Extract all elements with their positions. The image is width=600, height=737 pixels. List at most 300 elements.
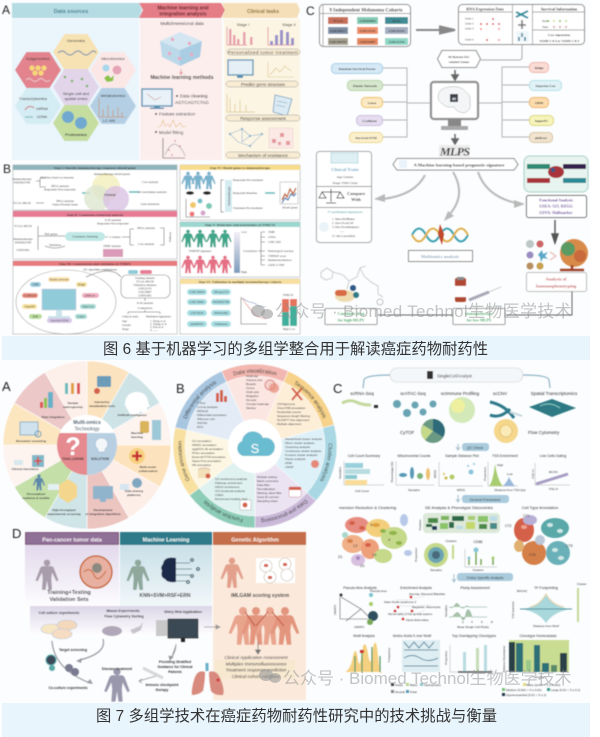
sector text lists: tSNE — [285, 461, 292, 465]
icon: computer with AI brain — [431, 82, 478, 130]
block: melanoma cohorts: 9 Independent Melanoma Cohorts — [329, 8, 403, 14]
chart row: repertoire analysis: Acidic — [395, 683, 404, 687]
chart row: omics specific analysis: Mean Single Cell Ploidy — [457, 625, 489, 629]
panel: step III: Gender — [122, 323, 131, 327]
pill: QC check: QC Check — [467, 446, 483, 450]
center with cloud: S — [251, 441, 260, 456]
block: melanoma cohorts: GSE48517 — [330, 29, 346, 33]
chart row: omics specific analysis: Anemia, Diamond-Blackfan — [409, 592, 446, 596]
QC charts row: Proportion — [483, 467, 487, 481]
sector text lists: Sampling sheet — [257, 499, 278, 503]
left algorithm chips: CoxBoost — [362, 119, 378, 123]
QC charts row: 80.0% — [549, 470, 558, 474]
sector text lists: Violin plot — [246, 390, 259, 394]
block: melanoma cohorts: GSE22155 — [360, 29, 376, 33]
icon: scale — [319, 189, 344, 203]
general framework titles: mension Reduction & Clustering — [339, 505, 396, 510]
heading — [120, 532, 212, 545]
lower workflow: treatment: Disease treatment — [102, 667, 133, 671]
box: immunotherapy — [453, 308, 505, 324]
block: clinical traits and compare: Compare — [347, 191, 365, 196]
panel: step III: Validation datasets: — [133, 283, 157, 287]
sector text lists: Batch correction — [257, 479, 279, 483]
sector text lists: Sequence length filtering — [277, 414, 310, 418]
heading: MLPS: MLPS — [439, 144, 470, 158]
arrow: genes to monitor — [452, 70, 458, 80]
panel: step II: Step II: Consensus clustering analysis — [67, 213, 124, 217]
panel: step III: Published signatures — [146, 314, 172, 318]
band: experiments: Cell culture experiments — [39, 611, 79, 615]
sector text lists: Nucleotide counts — [277, 410, 301, 414]
panel: step III: Step Cox — [82, 304, 94, 308]
panel: step III: plsRcox — [85, 294, 95, 298]
chart: stage bars: Stage II — [282, 22, 296, 27]
hexagon: metabolomics: LC-MS — [103, 118, 116, 123]
pill: predict gene structure: Predict gene structure — [241, 82, 286, 87]
chart: cell type annotation UMAP: CT5 — [566, 544, 573, 548]
panel: step VI — [180, 279, 300, 334]
modality row: Flow Cytometry — [528, 430, 560, 435]
wheel hub: Multi-omics — [73, 420, 101, 426]
text: feature extraction — [155, 112, 196, 127]
hexagon: proteomics — [53, 105, 99, 141]
wedge icons and labels: Biomarker screening — [16, 439, 46, 443]
heading — [26, 532, 118, 544]
panel: step III: SuperPC — [25, 304, 35, 308]
sector text lists: eggNOG-db annotation — [192, 447, 223, 451]
panel: clinical tasks — [222, 3, 300, 160]
chart row: repertoire analysis: Amino Acids K-mer Motif — [393, 634, 431, 638]
modality row: scRNA-Seq — [350, 391, 374, 396]
chart: polar proportion and CD86: Proportion — [414, 548, 418, 562]
pill: QC check — [456, 443, 489, 451]
sector text lists: Enrichment bubble chart — [215, 497, 248, 501]
panel: step IV: Responder-Baseline — [233, 191, 258, 195]
sector text lists: Kmeans cluster analysis — [285, 453, 318, 457]
chart row: omics specific analysis — [333, 582, 587, 629]
hexagon: transcriptomics: mRNA — [36, 106, 48, 111]
panel: step V: Pathological reaction — [268, 249, 294, 253]
ring sectors — [173, 364, 337, 528]
icon: DNA with multiomics label: Multiomics analysis — [421, 254, 459, 259]
pill: response assessment: Response assessment — [240, 116, 287, 121]
ring labels: Sequence analysis — [294, 380, 326, 419]
chart row: repertoire analysis: Hydrophobic — [424, 683, 441, 687]
sector text lists: Differential expression — [197, 413, 227, 417]
panel: step IV — [180, 165, 300, 220]
panel: step II: Responder-Non-responder — [97, 222, 129, 226]
panel: step III: CPH — [33, 282, 39, 286]
chart row: omics specific analysis: UMAP2 — [333, 605, 337, 615]
block: clinical traits and compare: 27. Hu-CancerMed — [332, 234, 356, 238]
hexagon: transcriptomics: cDNA — [37, 114, 48, 119]
sector text lists: Sankey — [246, 406, 257, 410]
chart: model fitting — [155, 130, 185, 158]
panel: step I: RNASeq based on response — [40, 176, 74, 180]
modality row: scImmune Profiling — [441, 391, 480, 396]
panel: step VI: High Low — [283, 327, 296, 331]
chart row: omics specific analysis: Samples — [444, 605, 448, 617]
box: functional analysis: GSVA: Hallmarker — [539, 210, 573, 215]
panel: step I — [12, 165, 177, 212]
right algorithm chips: plsRcox — [535, 136, 547, 140]
hexagon: epigenomics: Epigenomics — [27, 56, 49, 61]
banner: prognostic signature: A Machine learning-based prognostic signature — [414, 162, 504, 168]
icon: computer with AI brain: AI — [452, 96, 456, 101]
pill: personalized tumor treatment: Personalized tumor treatment — [228, 50, 299, 55]
sector text lists: T-Test — [197, 401, 205, 405]
center with cloud — [228, 419, 282, 473]
ring labels: Cluster analysis — [320, 442, 333, 482]
sector text lists: Limma analysis — [197, 405, 218, 409]
arrow: to MLPS — [452, 134, 458, 144]
chart: stage bars — [227, 22, 296, 45]
figure: body group with pathways — [229, 607, 299, 645]
modality row — [342, 391, 578, 443]
panel: step I: Gene mutations — [141, 202, 160, 206]
sector text lists: Hierarchical cluster analysis — [285, 437, 323, 441]
pill: general framework: General Framework — [470, 498, 501, 502]
chart row: omics specific analysis: 8 — [491, 620, 493, 624]
sector text lists: ANOVA — [197, 421, 207, 425]
chart row: omics specific analysis: Tn5 insertion — [511, 601, 515, 619]
chart: multi-omics wheel — [3, 361, 171, 529]
panel: step IV: Responder-Pre-treatment — [233, 178, 263, 182]
hexagon: single-cell and spatial omics — [53, 69, 99, 105]
heading: clinical tasks — [222, 3, 300, 18]
block: clinical traits and compare: 27 published signatures — [327, 210, 363, 214]
wedge icons and labels: platforms — [127, 493, 141, 497]
panel: step III: 3. Fan et al — [150, 325, 163, 329]
panel: step I: DEGs analysis — [56, 199, 75, 203]
sector text lists: Circos — [246, 386, 255, 390]
wedge icons and labels: medicine & models — [22, 496, 50, 500]
left algorithm chips: Survival-SVM — [355, 136, 377, 140]
block: melanoma cohorts: SU2C — [392, 19, 401, 23]
inner sectors — [185, 376, 325, 516]
box: candidate drug — [325, 308, 377, 324]
panel: step IV: Step IV: Model genes in immunotherapy — [210, 166, 270, 170]
lower workflow: treatment: Immune checkpoint — [146, 683, 179, 687]
caption band: figure 7: 图 7 多组学技术在癌症药物耐药性研究中的技术挑战与衡量 — [96, 708, 497, 725]
panel: step I: DEGs analysis — [51, 184, 70, 188]
wedge icons and labels: Data integration — [42, 415, 65, 419]
panel: genetic algorithm: Genetic Algorithm — [231, 538, 279, 544]
chart row: repertoire analysis: Relative Abundance — [502, 645, 506, 672]
icon: network and grid — [229, 128, 293, 148]
band: experiments — [30, 606, 220, 642]
hexagon: single-cell and spatial omics: spatial omics — [64, 96, 88, 101]
map: biological pathways — [524, 156, 588, 192]
chart row: repertoire analysis: Polar — [410, 690, 417, 694]
panel: step VI: IMvigor210 — [214, 290, 229, 294]
panel: step III: GSE91061 — [138, 294, 152, 298]
chart: UMAP clusters: 12 — [353, 543, 358, 548]
sector text lists: GO enrichment analysis — [215, 477, 248, 481]
panel: data sources: Data sources — [54, 9, 88, 15]
box: functional analysis — [526, 196, 586, 218]
text: multidimensional data: Multidimensional data — [160, 21, 204, 26]
icon: monitor — [142, 89, 172, 109]
chart row: omics specific analysis: TF Footprinting — [534, 586, 558, 590]
sector text lists: Boxplot — [246, 382, 256, 386]
panel: step VI: Step VI: Validation in multiple immunotherapy cohorts — [199, 280, 282, 284]
hexagon: microbiomics — [90, 52, 136, 88]
lower workflow: treatment: Providing Stratified — [159, 660, 191, 664]
panel: step VI: PRJEB25780 — [213, 300, 230, 304]
block: clinical traits and compare: Age Gender — [336, 175, 354, 179]
icon: DNA with multiomics label — [408, 224, 472, 262]
chart: UMAP clusters: 21 — [338, 554, 343, 559]
panel: step II: Validation — [49, 243, 62, 247]
chart: DE heatmap: Clusters — [418, 519, 422, 531]
wedge icons and labels: Personalized — [27, 492, 45, 496]
chart: cell type annotation UMAP: CT6 — [529, 553, 536, 557]
QC charts row: FSC-A — [549, 487, 558, 491]
box: candidate drug: Candidate drug — [337, 311, 365, 316]
QC charts row: High — [497, 463, 504, 467]
chart row: omics specific analysis: Cluster — [577, 582, 587, 586]
connectors: algorithms — [383, 67, 529, 137]
right algorithm chips — [530, 62, 562, 142]
chart row: omics specific analysis: Pseudo-time — [370, 589, 387, 593]
panel: step I: Responder-Non-responder — [44, 188, 76, 192]
chart row: repertoire analysis: Hyperexpanded (0.01 < X ≤ 1) — [506, 693, 546, 697]
block: melanoma cohorts: GSE100797 — [329, 40, 347, 44]
chart row: omics specific analysis: BACH2 — [517, 589, 527, 593]
sector text lists: Normalization — [257, 487, 276, 491]
right algorithm chips: SuperPC — [535, 119, 549, 123]
chart: polar proportion and CD86 — [414, 539, 497, 572]
wedge icons and labels: High-throughput — [52, 508, 76, 512]
box: functional analysis: GSEA: GO, KEGG — [539, 204, 573, 208]
wedge icons and labels — [12, 376, 161, 516]
panel: step V: Low — [241, 230, 248, 234]
right algorithm chips: Stepwise Cox — [536, 84, 556, 88]
box: immunophenotyping: Analysis of — [545, 276, 567, 282]
chart: polar proportion and CD86: CD86 — [474, 540, 483, 544]
band: experiments: Flow Cytometry Sorting — [104, 614, 144, 618]
panel label A: A — [2, 379, 11, 394]
ring labels — [177, 368, 333, 523]
arrow — [180, 69, 182, 74]
sector text lists: GO annotation — [192, 439, 212, 443]
text: clinical application: Clinical cohort validation — [232, 674, 281, 679]
wedge icons and labels: heterogeneity — [63, 405, 83, 409]
panel label B: B — [3, 162, 11, 176]
block: RNA expression and survival data: Gene 1 — [465, 16, 474, 20]
panel: pan-cancer tumor data: Training+Testing — [47, 590, 91, 596]
hexagon: transcriptomics — [15, 88, 61, 124]
panel: step V: High — [241, 270, 248, 274]
chart row: repertoire analysis: Frequency — [387, 647, 391, 662]
QC charts row: MDS1 — [457, 488, 465, 492]
panel label C: C — [306, 4, 315, 18]
wedge icons and labels: learning — [131, 435, 143, 439]
hexagon: robust genes: related Genes — [449, 60, 470, 64]
chart: UMAP clusters: 4 — [388, 537, 391, 542]
wedge icons and labels: Development — [94, 508, 112, 512]
chart row: repertoire analysis: Proportion — [444, 651, 448, 665]
ring labels: Function analysis — [204, 500, 244, 523]
lower workflow: treatment: Patients — [168, 670, 182, 674]
text: clinical application: Clinical Application Assessment — [224, 655, 288, 660]
chart row: repertoire analysis — [345, 634, 580, 697]
ring labels: Differential analysis — [182, 380, 217, 420]
chart: model fitting: Model fitting — [159, 130, 184, 135]
panel: step II: Core analysis — [138, 242, 155, 246]
chart row: omics specific analysis: 6 — [481, 620, 483, 624]
panel: step III: 1. Dong et al — [150, 319, 166, 323]
block: RNA expression and survival data — [458, 4, 584, 44]
panel: pan-cancer tumor data: Pan-cancer tumor data — [42, 538, 103, 544]
lower workflow: treatment: therapy — [156, 688, 168, 692]
panel: step I: TNFRSF — [104, 193, 116, 197]
panel: step II: Immunotherapy — [13, 237, 33, 241]
panel: step VI: GSE126044 — [190, 290, 205, 294]
wedge icons and labels: Artificial intelligence — [117, 413, 147, 417]
pill: response assessment — [226, 115, 300, 121]
chart: analysis wheel — [172, 364, 338, 528]
lower workflow: treatment: Guidance for Clinical — [157, 665, 193, 669]
panel: step III: CoxBoost — [24, 294, 36, 298]
chart row: repertoire analysis: Rare (1e-04 < X ≤ 0.001) — [527, 683, 560, 687]
panel: step III: Lasso — [78, 314, 85, 318]
panel: step V: GDSC/CTRP — [268, 263, 285, 267]
band: experiments: Shiny Web Application — [164, 610, 202, 614]
panel: step III: Survival-SVM — [51, 318, 69, 322]
hexagon: proteomics: Proteomics — [65, 132, 88, 137]
wedge icons and labels: collaboration — [139, 469, 158, 473]
panel: genetic algorithm: iMLGAM scoring system — [231, 593, 290, 599]
panel: step VI: TNRCSI — [283, 293, 293, 297]
panel: step V: Immunomodulators — [268, 258, 292, 262]
watermark: figure 6: 公众号 · Biomed Technol生物医学技术 — [275, 302, 572, 321]
panel: step V: CNR TMT — [268, 240, 281, 244]
chart row: repertoire analysis: Clonotype Homeostasis — [520, 634, 557, 638]
hexagon: epigenomics — [15, 52, 61, 88]
panel: step III: K-M analysis — [137, 301, 154, 305]
panel: step II: DEGs analysis — [137, 226, 156, 230]
panel: step II: PRJEB23709 — [15, 240, 32, 244]
arrows: immune to therapies — [378, 291, 572, 315]
box: immunotherapy: for low-MLPS — [467, 318, 492, 322]
block: RNA expression and survival data: Gene n — [465, 38, 474, 42]
hexagon: robust genes: 40 Robust OS- — [448, 55, 471, 59]
panel: step III: 4. ...... — [150, 328, 158, 332]
sector text lists: Pareto analysis — [285, 457, 306, 461]
hexagon: metabolomics: Metabolomics — [101, 93, 125, 98]
block: clinical traits and compare: 1. Shen-MolBlmes — [332, 217, 355, 221]
chart row: omics specific analysis: Bagatelle, Macrocytic — [412, 605, 441, 609]
wheel hub: Technology — [74, 426, 100, 432]
panel: step II: TIME analysis — [103, 244, 122, 248]
chart row: omics specific analysis: Ploidy Assessment — [460, 586, 490, 590]
QC charts row: FSC-H — [531, 469, 535, 479]
icon: data cube — [160, 32, 202, 66]
wheel hub — [57, 415, 117, 475]
banner: prognostic signature — [393, 158, 518, 170]
ring labels: Data visualization — [232, 368, 277, 376]
wheel hub: CHALLENGE — [62, 457, 85, 461]
panel: machine learning — [120, 532, 212, 610]
panel: step III: Stage — [122, 327, 129, 331]
chart: stage bars: Stage I — [237, 22, 249, 27]
modality row: CyTOF — [400, 430, 415, 435]
block: clinical traits and compare: Stage TNM Clark — [332, 181, 358, 185]
panel: step V: Step V: Molecular characterization of TNRCSI — [205, 223, 276, 227]
QC charts row: Cell Count Summary — [348, 454, 380, 458]
wedge icons and labels: Sample — [68, 401, 79, 405]
chart: UMAP clusters: 3 — [370, 522, 373, 527]
sector text lists: MSIDC annotation — [192, 443, 217, 447]
chart: cell type annotation UMAP: CT2 — [505, 524, 512, 528]
wedge icons and labels: of integration algorithms — [85, 512, 121, 516]
panel: step VI: Nathanson — [215, 322, 228, 326]
panel: step V: TNFRSF score — [268, 254, 287, 258]
chart: UMAP clusters: 20 — [360, 563, 365, 568]
block: RNA expression and survival data: Status — [542, 19, 550, 23]
QC charts row: Samples — [408, 488, 420, 492]
text: data cleaning: Data cleaning — [180, 94, 208, 98]
wedge icons and labels: Data sharing — [125, 489, 143, 493]
sector text lists: SLOWT7 free alignment — [277, 418, 309, 422]
panel label B: B — [176, 381, 185, 396]
left algorithm chips: Lasso — [368, 101, 377, 105]
panel: step IV: Treatment-Pre-treatment — [233, 206, 263, 210]
panel: step II: K-M analysis — [105, 218, 122, 222]
QC charts row: MDS2 — [433, 470, 437, 478]
sector text lists: Mfuzz cluster analysis — [285, 441, 315, 445]
band: experiments: Mouse Experiments — [106, 609, 140, 613]
panel: step III — [13, 261, 177, 334]
panel: step IV: Immunotherapy — [227, 186, 231, 206]
panel: step III: Elastic network — [50, 278, 69, 282]
chart row: repertoire analysis: Neutral — [395, 690, 405, 694]
panel: machine learning: KNN+SVM+RSF+ERN — [140, 593, 191, 599]
block: clinical traits and compare: With — [351, 197, 361, 202]
panel: step II — [13, 211, 177, 259]
hexagon: robust genes — [438, 50, 480, 68]
block: melanoma cohorts — [320, 4, 410, 46]
panel: step I: TCGA-SKCM — [13, 201, 31, 205]
modality row: scCNV — [493, 391, 507, 396]
sector text lists: Ridgeline — [246, 394, 259, 398]
block: RNA expression and survival data: Survival Information — [541, 6, 578, 12]
pill: omics specific analysis: Omics Specific Analysis — [467, 576, 504, 580]
box: immunophenotyping — [526, 272, 586, 292]
panel: machine learning and integration analysis: Machine learning and — [157, 6, 209, 12]
panel: step III: GSE19987 — [138, 290, 152, 294]
heading — [213, 532, 306, 545]
sector text lists: DESeq2 — [197, 409, 209, 413]
sector text lists: KEGG enrichment — [215, 485, 240, 489]
figure 7 — [2, 361, 587, 702]
heading: data sources — [12, 3, 142, 18]
panel: step IV: Model genes — [282, 206, 299, 210]
sector text lists: Data filter — [257, 483, 270, 487]
block: RNA expression and survival data: RNA Expression Data — [466, 6, 504, 12]
block: clinical traits and compare: Clinical Traits — [331, 167, 359, 172]
panel: step III: 2. Zhang et al — [150, 322, 167, 326]
panel: step I: Immunotherapy — [12, 177, 32, 181]
caption band: figure 7 — [2, 703, 590, 737]
sector text lists: Clustering analysis — [285, 445, 311, 449]
chart row: omics specific analysis: Pseudo-time Analysis — [343, 586, 377, 590]
chart row: omics specific analysis: Hand deformities — [406, 618, 429, 622]
modality row: Spatial Transcriptomics — [531, 391, 578, 396]
sector text lists: Swiss-Prot annotation — [192, 459, 222, 463]
